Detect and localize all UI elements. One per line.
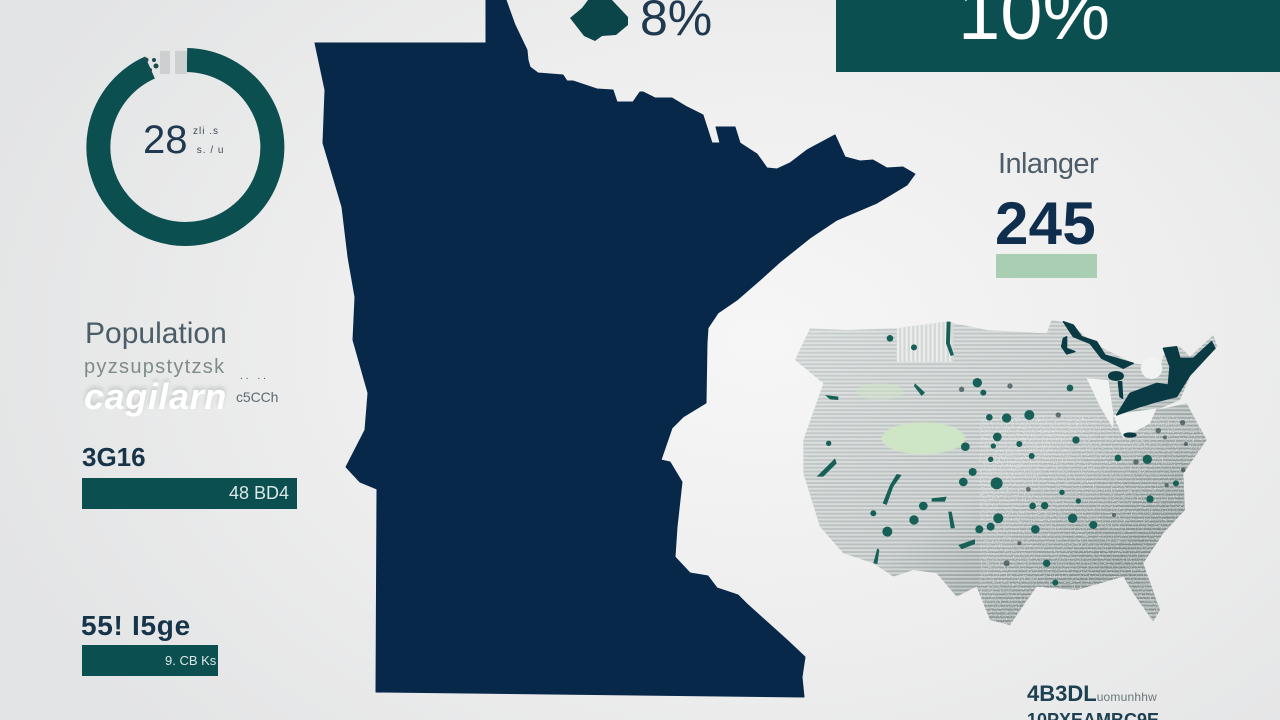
donut chart (98, 51, 272, 234)
value bar: upper left (82, 478, 297, 509)
caption garbled: pyzsupstytzsk (84, 356, 225, 378)
donut value: 28 (143, 118, 188, 162)
city markers and rivers (817, 322, 1179, 586)
heading: Inlanger: Inlanger (998, 148, 1098, 180)
small label: c5CCh (236, 389, 278, 405)
great lakes dark water (1062, 322, 1215, 437)
upper bar value: 48 BD4 (229, 483, 289, 503)
value bar: lower left (82, 645, 218, 676)
stat: 245: 245 (995, 190, 1096, 257)
stat: lower bar label: 55! I5ge (81, 610, 191, 641)
value bar: inland accent (996, 254, 1097, 278)
map of United States (795, 320, 1218, 625)
map of Minnesota (315, 0, 915, 697)
heading: Population: Population (85, 317, 227, 350)
icon: blob beside 8% (570, 0, 628, 41)
white italic word: cagilarn (84, 376, 227, 417)
dark speckles in the east (959, 383, 1188, 566)
donut small caption: zli .s s. / u (193, 126, 224, 156)
great lakes cutouts (1087, 358, 1162, 438)
small dots caption: .. .. (240, 371, 269, 382)
green highlight region (857, 383, 965, 454)
value bar: top right banner (836, 0, 1280, 72)
stat: upper bar label: 3G16 (82, 442, 146, 472)
lower bar value: 9. CB Ks (165, 653, 216, 668)
